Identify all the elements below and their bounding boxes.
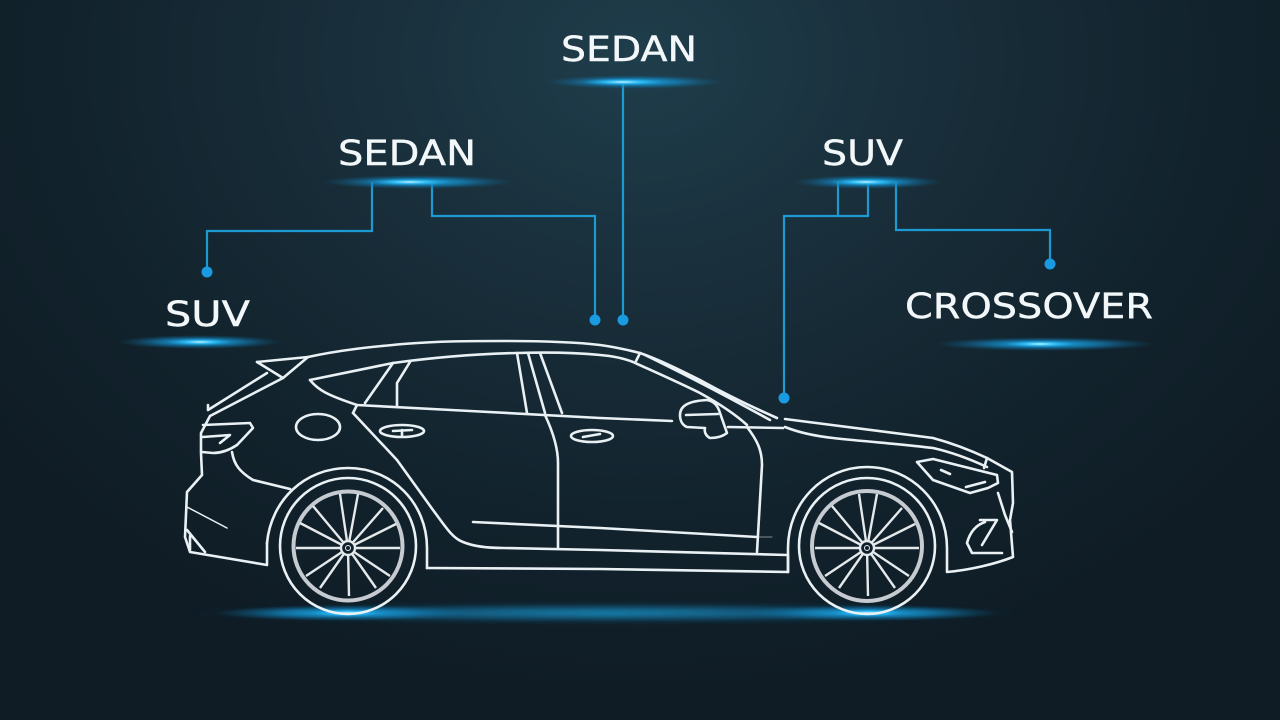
label: left sedan — [322, 134, 514, 189]
rear wheel arch — [267, 468, 427, 568]
label: left suv — [118, 295, 282, 349]
connector lines — [202, 82, 1056, 404]
car outline — [185, 341, 1013, 572]
connector: suv to windshield base — [784, 182, 868, 398]
label: right suv — [794, 134, 942, 189]
sill lines — [427, 555, 788, 572]
roof, spoiler and rear body — [308, 341, 777, 418]
windshield — [636, 353, 770, 420]
body crease — [473, 522, 757, 537]
fuel door — [296, 414, 340, 440]
label: left sedan: SEDAN — [338, 134, 476, 174]
label: crossover: CROSSOVER — [905, 287, 1153, 327]
tail light — [202, 423, 253, 453]
connector: left sedan to roof — [432, 182, 595, 320]
label: crossover — [905, 287, 1155, 351]
label: top sedan — [544, 30, 724, 89]
mirror — [680, 400, 727, 438]
label: top sedan: SEDAN — [561, 30, 697, 70]
fog light — [967, 520, 1002, 553]
connector dots — [202, 258, 1056, 404]
windows — [310, 353, 747, 425]
headlight — [917, 459, 998, 493]
door handles — [380, 425, 424, 437]
label: right suv: SUV — [822, 134, 903, 174]
rear panel creases — [232, 452, 290, 489]
connector: left sedan to suv — [207, 182, 372, 272]
rear wheel — [280, 478, 416, 614]
hood and nose — [785, 419, 1013, 572]
door shutlines — [545, 415, 558, 548]
connector: top sedan to roof — [622, 82, 624, 320]
front wheel — [799, 478, 935, 614]
connector: suv to crossover — [896, 182, 1050, 264]
label: left suv: SUV — [165, 295, 250, 335]
ground glow — [185, 603, 1025, 623]
